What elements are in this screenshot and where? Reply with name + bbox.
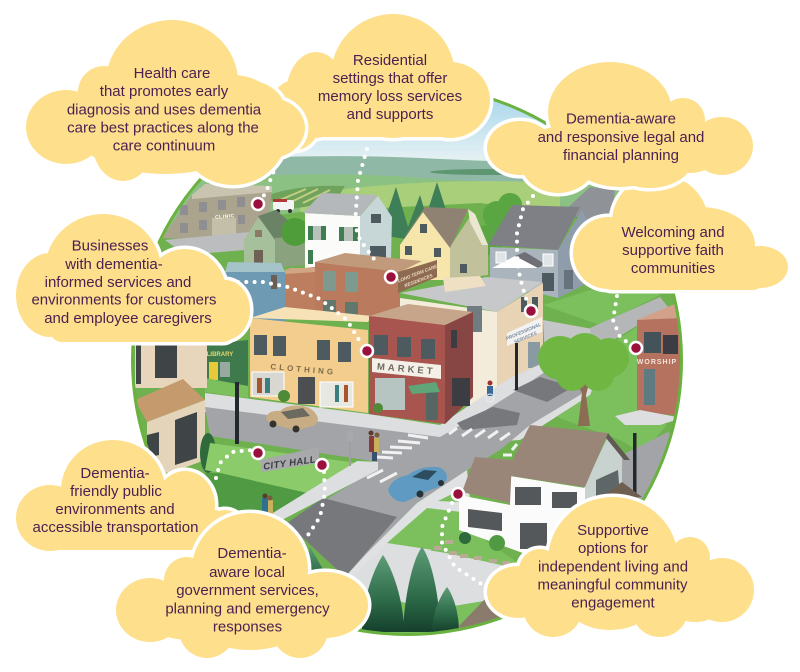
cloud: legal and financial planning: financial planning xyxy=(563,147,679,164)
crosswalk stripes xyxy=(367,428,517,482)
cloud: public environments and transportation: accessible transportation xyxy=(33,519,198,536)
cloud: independent living and community engagement: options for xyxy=(578,540,648,557)
curb and sidewalk at lower right xyxy=(345,470,470,590)
grey-blue house xyxy=(488,205,590,298)
grey house behind at far right xyxy=(568,187,615,220)
street sign xyxy=(349,458,351,466)
sky xyxy=(290,101,546,161)
city hall lawn xyxy=(205,443,354,513)
cloud: faith communities: Welcoming and xyxy=(621,224,725,241)
worship building xyxy=(615,303,684,425)
path to worship xyxy=(590,297,668,405)
white house xyxy=(303,193,392,270)
cloud: legal and financial planning: and responsive legal and xyxy=(538,129,704,146)
tan car xyxy=(266,406,318,432)
cloud: public environments and transportation xyxy=(16,440,245,551)
dotted connector lines xyxy=(216,149,630,585)
distant hills xyxy=(159,156,620,246)
evergreen trees behind houses xyxy=(388,182,446,239)
cloud: local government services: planning and emergency xyxy=(165,600,330,618)
cloud: public environments and transportation: environments and xyxy=(55,501,175,518)
professional services sign: PROFESSIONAL xyxy=(505,322,542,342)
ground xyxy=(159,203,576,260)
clinic building xyxy=(162,184,272,255)
professional services sign: SERVICES xyxy=(513,330,539,346)
long term care residences brick building xyxy=(285,253,439,320)
cloud: faith communities: communities xyxy=(631,260,715,277)
yellow house xyxy=(398,207,488,280)
house front lawn xyxy=(387,508,517,567)
illustrated town scene in circle xyxy=(130,85,690,640)
street surface xyxy=(205,372,585,577)
cloud: independent living and community engagement: meaningful community xyxy=(537,576,688,594)
location markers xyxy=(252,198,642,500)
clinic building: CLINIC xyxy=(215,213,235,221)
bottom green xyxy=(350,588,490,640)
lawn behind professional services xyxy=(544,290,660,324)
worship building: WORSHIP xyxy=(637,359,677,366)
cloud: independent living and community engagement: Supportive xyxy=(577,522,649,539)
long term care sign: RESIDENCES xyxy=(404,273,434,288)
professional services sign xyxy=(505,317,542,346)
cloud: legal and financial planning: Dementia-aware xyxy=(566,110,676,128)
cloud: local government services: government services, xyxy=(176,582,319,599)
cloud: health care xyxy=(26,20,305,185)
cloud: local government services: aware local xyxy=(209,564,285,581)
professional services building xyxy=(400,276,543,405)
cloud: legal and financial planning xyxy=(487,62,753,193)
cloud: businesses: with dementia- xyxy=(64,256,163,273)
cloud: health care: that promotes early xyxy=(100,83,229,100)
market sign: MARKET xyxy=(377,361,436,378)
grass lawn at right xyxy=(557,325,667,453)
sidewalk beside city hall lawn xyxy=(268,461,378,522)
cloud: businesses: informed services and xyxy=(45,274,191,291)
blue car xyxy=(388,467,447,502)
cloud: faith communities xyxy=(573,175,788,290)
sidewalks along main street xyxy=(205,362,595,445)
cloud: local government services: Dementia- xyxy=(217,545,287,562)
cloud: independent living and community engagement: engagement xyxy=(571,594,656,612)
cloud: residential settings xyxy=(268,14,490,150)
lamp at professional services xyxy=(515,343,518,390)
cloud: businesses xyxy=(16,214,250,342)
white van xyxy=(273,199,294,213)
blue building xyxy=(225,262,285,322)
cloud: health care: care best practices along the xyxy=(67,120,259,136)
cloud: residential settings: settings that offer xyxy=(333,70,447,87)
large street tree xyxy=(538,333,629,426)
cloud: public environments and transportation: friendly public xyxy=(70,483,162,500)
cloud: health care: care continuum xyxy=(113,138,215,154)
library xyxy=(205,340,248,398)
cloud: health care: Health care xyxy=(134,65,210,82)
city hall sign: CITY HALL xyxy=(263,454,317,473)
cloud: businesses: Businesses xyxy=(72,238,148,254)
lamp post at library xyxy=(235,382,239,444)
bush by city hall xyxy=(200,433,216,473)
cloud: independent living and community engagement xyxy=(487,497,754,637)
long term care sign xyxy=(397,260,439,293)
dark asphalt patches xyxy=(287,377,573,577)
cloud: residential settings: memory loss services xyxy=(318,88,462,105)
walkway in front of house xyxy=(347,543,517,610)
large white house xyxy=(434,425,642,575)
leafy trees behind grey house xyxy=(480,193,578,255)
cloud: local government services: responses xyxy=(213,618,282,636)
cloud: independent living and community engagement: independent living and xyxy=(538,558,688,576)
clothing store xyxy=(250,307,372,413)
small green house xyxy=(244,210,309,268)
cloud: health care: diagnosis and uses dementia xyxy=(67,102,262,118)
library: LIBRARY xyxy=(207,352,233,358)
cloud: businesses: environments for customers xyxy=(31,292,217,308)
long term care sign: LONG TERM CARE xyxy=(397,263,439,283)
cream building at left xyxy=(135,338,207,475)
road at right edge xyxy=(622,432,680,502)
cloud: local government services xyxy=(116,513,368,658)
roof at bottom edge xyxy=(458,597,503,630)
bottom evergreen trees xyxy=(300,547,459,632)
cloud: businesses: and employee caregivers xyxy=(44,310,212,327)
cloud: residential settings: and supports xyxy=(347,106,433,123)
side street behind tree xyxy=(543,320,591,343)
lamp post at right xyxy=(633,433,636,493)
small lawn by house xyxy=(438,490,460,502)
pedestrians xyxy=(262,380,494,514)
cloud: faith communities: supportive faith xyxy=(622,242,724,259)
cloud: residential settings: Residential xyxy=(353,52,427,69)
cloud: public environments and transportation: Dementia- xyxy=(80,465,150,482)
market xyxy=(369,304,473,424)
clothing sign: CLOTHING xyxy=(270,362,336,377)
